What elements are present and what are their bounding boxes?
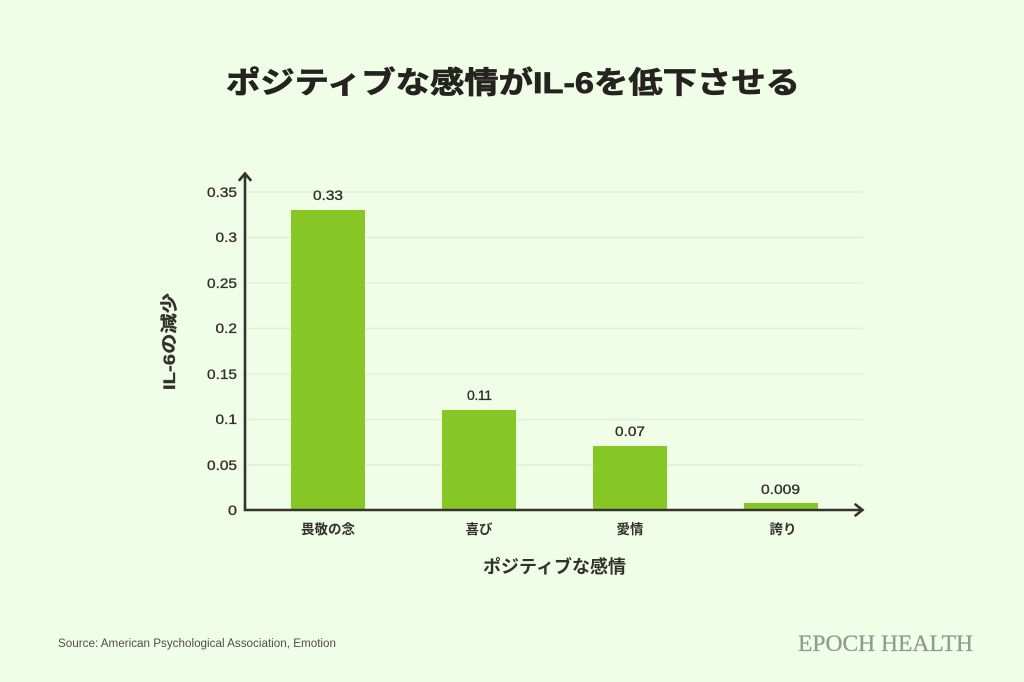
y axis tick labels: 0.25 (207, 275, 237, 291)
y axis tick labels: 0.2 (216, 320, 237, 336)
bar: 喜び 0.11 (442, 410, 516, 510)
y axis tick labels: 0 (228, 502, 237, 518)
y axis tick labels: 0.1 (216, 411, 237, 427)
y axis tick labels: 0.15 (207, 366, 237, 382)
x axis category labels: 愛情 (616, 521, 644, 537)
x axis category labels: 誇り (770, 521, 796, 537)
value labels: 0.33 (313, 187, 343, 203)
source note: Source: American Psychological Association, Emotion (58, 638, 336, 650)
title: ポジティブな感情がIL-6を低下させる (226, 66, 800, 100)
y axis tick labels: 0.3 (216, 229, 237, 245)
y axis tick labels (207, 184, 237, 518)
y axis title: IL-6の減少 (160, 293, 179, 390)
bar: 愛情 0.07 (593, 446, 667, 510)
value labels: 0.07 (615, 423, 645, 439)
value labels: 0.009 (761, 481, 800, 497)
value labels: 0.11 (467, 387, 492, 403)
logo: Epoch Health: EPOCH HEALTH (798, 631, 973, 656)
x axis title: ポジティブな感情 (483, 556, 626, 577)
y axis tick labels: 0.05 (207, 457, 237, 473)
bar: 誇り 0.009 (744, 503, 818, 510)
axes with arrows (240, 174, 862, 516)
x axis category labels (301, 521, 796, 537)
y axis tick labels: 0.35 (207, 184, 237, 200)
x axis category labels: 畏敬の念 (301, 521, 355, 537)
bar: 畏敬の念 0.33 (291, 210, 365, 510)
value labels (313, 187, 800, 497)
x axis category labels: 喜び (466, 521, 493, 537)
bar chart (207, 174, 863, 537)
